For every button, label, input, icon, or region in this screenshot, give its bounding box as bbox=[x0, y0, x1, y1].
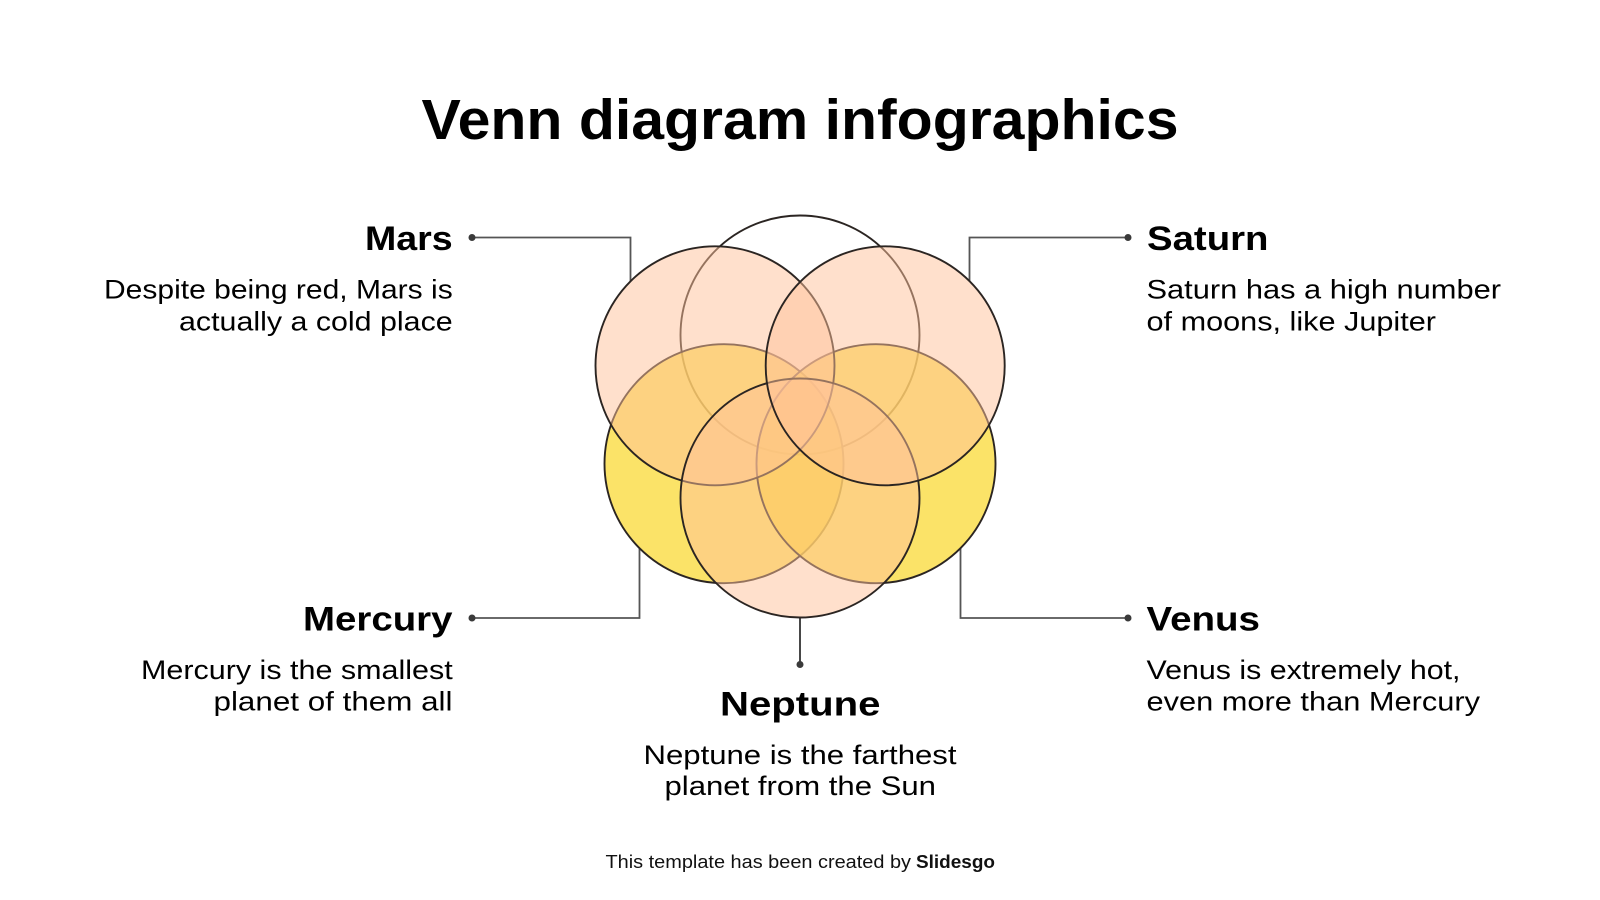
label: Saturn bbox=[1146, 220, 1501, 336]
footer credit: Slidesgo bbox=[916, 851, 995, 872]
circle: lower right yellow bbox=[756, 344, 996, 583]
connector: Venus bbox=[960, 548, 1132, 622]
label: Neptune: planet from the Sun bbox=[664, 771, 936, 801]
label: Saturn: Saturn has a high number bbox=[1146, 274, 1501, 304]
venn diagram bbox=[596, 216, 1005, 618]
label: Mars: Despite being red, Mars is bbox=[104, 274, 453, 304]
label: Venus bbox=[1146, 601, 1481, 716]
connector: Saturn bbox=[970, 234, 1132, 281]
circle: upper right peach bbox=[766, 246, 1005, 485]
connector: Mars bbox=[468, 234, 630, 281]
circle: lower left yellow bbox=[604, 344, 844, 583]
circle: upper left peach bbox=[596, 246, 834, 485]
label: Mars bbox=[104, 220, 453, 336]
connector: Mercury bbox=[468, 548, 640, 622]
connector: Neptune bbox=[796, 617, 804, 668]
label: Saturn: of moons, like Jupiter bbox=[1146, 306, 1436, 336]
label: Neptune: Neptune bbox=[720, 686, 880, 724]
label: Saturn: Saturn bbox=[1147, 220, 1268, 258]
footer credit: This template has been created by bbox=[606, 851, 912, 872]
label: Venus: Venus is extremely hot, bbox=[1146, 655, 1460, 685]
label: Mercury: Mercury bbox=[303, 601, 452, 639]
label: Venus: even more than Mercury bbox=[1146, 686, 1481, 716]
circle: bottom peach bbox=[680, 378, 920, 618]
label: Mars: Mars bbox=[365, 220, 453, 258]
label: Mercury: planet of them all bbox=[214, 686, 452, 716]
label: Mars: actually a cold place bbox=[179, 306, 453, 336]
title: Venn diagram infographics bbox=[422, 88, 1178, 152]
label: Mercury bbox=[141, 601, 453, 716]
label: Mercury: Mercury is the smallest bbox=[141, 655, 453, 685]
circle: top bbox=[680, 216, 920, 454]
label: Neptune: Neptune is the farthest bbox=[644, 740, 957, 770]
label: Venus: Venus bbox=[1146, 601, 1260, 639]
label: Neptune bbox=[644, 686, 957, 801]
